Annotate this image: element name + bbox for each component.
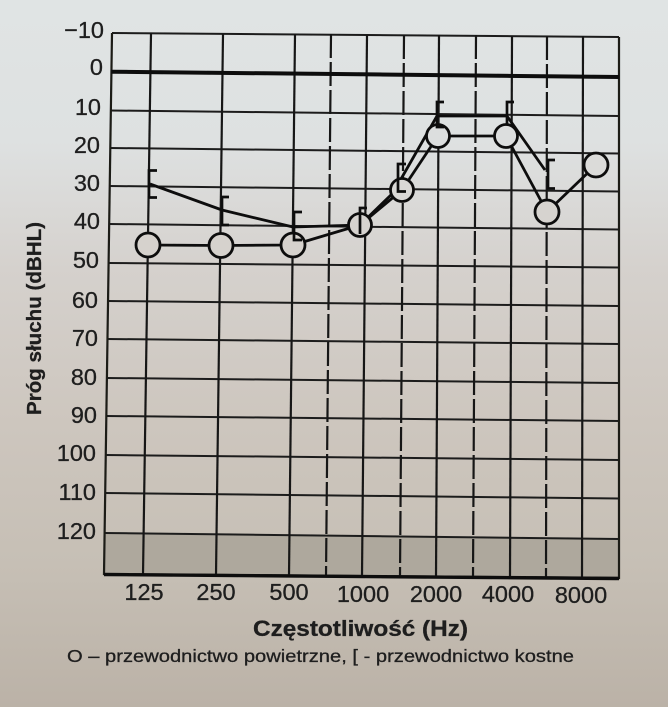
grid: horizontal lines — [105, 33, 619, 539]
y axis tick labels: 40 — [74, 208, 100, 234]
y axis tick labels — [57, 17, 104, 544]
air conduction markers — [136, 124, 608, 258]
y axis tick labels: 100 — [57, 440, 96, 466]
bone conduction line — [150, 116, 545, 227]
bone conduction markers — [149, 102, 555, 240]
x axis tick labels: 4000 — [482, 581, 534, 607]
y axis tick labels: 60 — [72, 287, 98, 313]
y axis title: Próg słuchu (dBHL) — [24, 222, 46, 415]
y axis tick labels: 120 — [57, 518, 96, 544]
chart frame — [104, 33, 619, 578]
y axis tick labels: 30 — [74, 170, 100, 196]
zero hearing level line — [111, 72, 619, 77]
x axis tick labels: 1000 — [337, 581, 389, 607]
x axis tick labels — [124, 579, 607, 608]
y axis tick labels: 0 — [90, 54, 103, 80]
y axis tick labels: 50 — [73, 247, 99, 273]
y axis tick labels: 10 — [75, 94, 101, 120]
legend: O – przewodnictwo powietrzne, [ - przewodnictwo kostne — [67, 646, 574, 666]
x axis title: Częstotliwość (Hz) — [253, 616, 468, 641]
x axis tick labels: 250 — [196, 579, 236, 605]
x axis tick labels: 500 — [269, 579, 309, 605]
bottom axis line — [104, 574, 619, 578]
y axis tick labels: 90 — [71, 402, 97, 428]
y axis tick labels: 20 — [74, 132, 100, 158]
y axis tick labels: 80 — [71, 364, 97, 390]
y axis tick labels: 110 — [59, 479, 96, 505]
shaded band below 120 dB — [104, 533, 619, 578]
y axis tick labels: −10 — [64, 17, 104, 43]
grid: dashed vertical lines — [326, 34, 547, 578]
grid: solid vertical lines — [143, 33, 583, 578]
x axis tick labels: 8000 — [555, 582, 607, 608]
air conduction line — [148, 136, 596, 246]
x axis tick labels: 2000 — [410, 581, 462, 607]
x axis tick labels: 125 — [124, 579, 164, 605]
y axis tick labels: 70 — [72, 325, 98, 351]
